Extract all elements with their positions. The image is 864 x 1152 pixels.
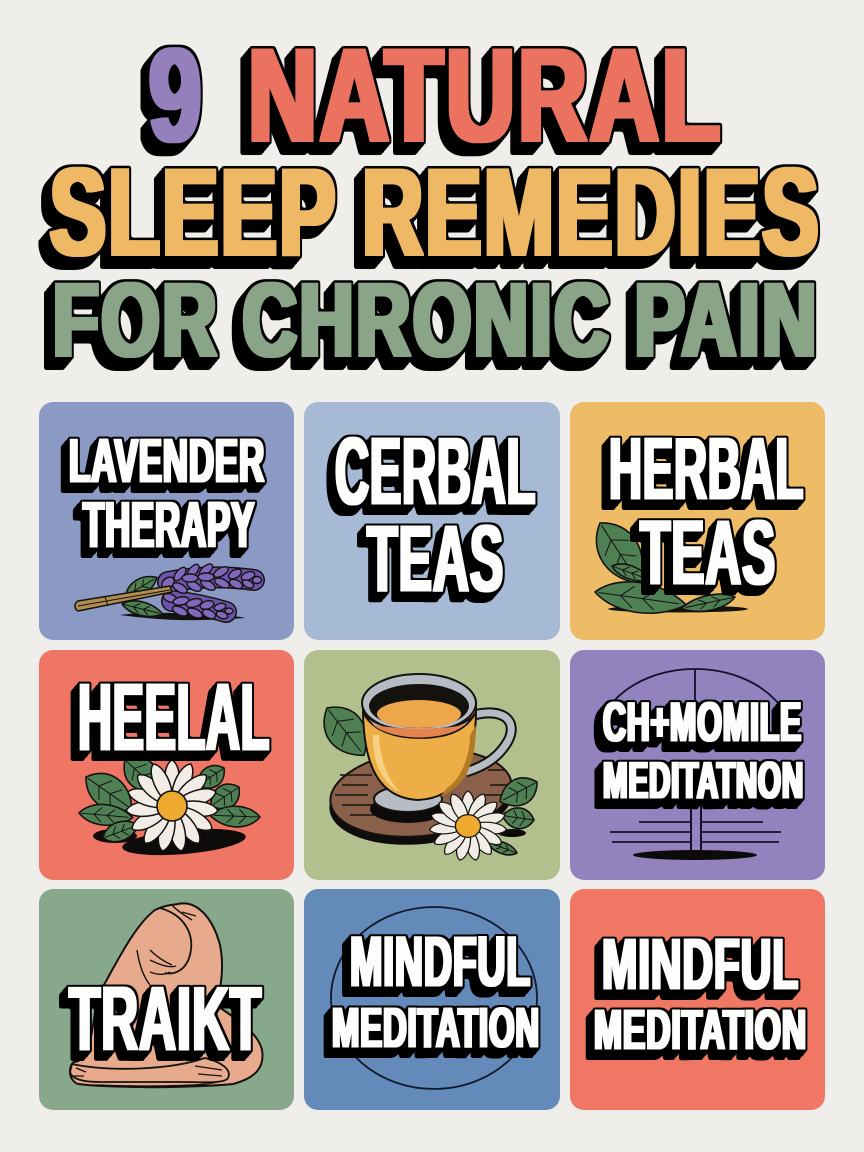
panel: chamomile meditation <box>570 650 825 880</box>
panel: cerbal teas: CERBAL <box>335 418 536 525</box>
card background <box>570 402 825 640</box>
label lavender: LAVENDER <box>69 427 265 496</box>
label meditation: MEDITATION <box>332 996 540 1060</box>
icon: crossed arms and knee <box>70 903 263 1088</box>
card background <box>304 889 560 1110</box>
panel: herbal teas <box>570 402 825 640</box>
cup handle <box>466 713 511 772</box>
card background <box>570 889 825 1110</box>
panel: mindful meditation coral <box>570 889 825 1110</box>
icon: tea cup on coaster with daisy <box>313 674 543 861</box>
leaf <box>313 696 379 766</box>
icon: lavender bundle <box>75 562 262 621</box>
icon: circle <box>331 907 537 1089</box>
coaster <box>325 741 517 853</box>
icon: herbal leaves <box>584 512 748 619</box>
cup rim and tea surface <box>362 674 476 738</box>
panel: lavender therapy <box>39 402 294 640</box>
cup body <box>363 702 476 800</box>
card background <box>304 650 560 880</box>
title number 9: 9 <box>149 22 204 170</box>
panel: traikt <box>39 889 294 1110</box>
panel: herbal tea cup <box>304 650 560 880</box>
card background <box>304 402 560 640</box>
card background <box>39 402 294 640</box>
panel: mindful meditation blue <box>304 889 560 1110</box>
card background <box>570 650 825 880</box>
card background <box>39 650 294 880</box>
panel: heelal: HEELAL <box>78 664 270 771</box>
cup base <box>374 786 442 812</box>
label traikt: TRAIKT <box>69 969 262 1070</box>
label teas: TEAS <box>367 506 504 612</box>
panel: heelal <box>39 650 294 880</box>
panel: cerbal teas <box>304 402 560 640</box>
label therapy: THERAPY <box>83 488 255 561</box>
daisy and leaves <box>429 771 543 861</box>
card background <box>39 889 294 1110</box>
title <box>50 22 821 379</box>
label mindful: MINDFUL <box>350 923 531 1002</box>
icon: daisy with leaves <box>77 748 260 859</box>
icon: dome and pole <box>610 669 781 860</box>
